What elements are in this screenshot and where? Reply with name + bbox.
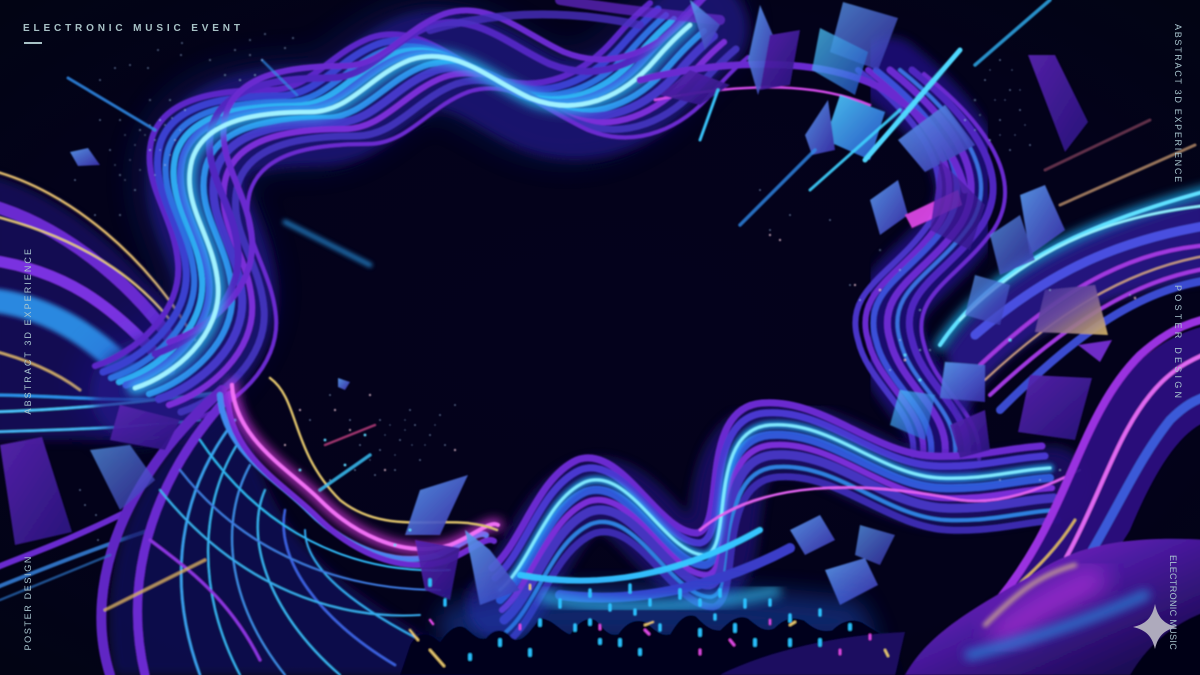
glitter particles <box>60 34 1135 545</box>
bottom wave ribbon <box>492 403 1080 642</box>
shards right <box>640 185 1112 675</box>
shards upper right <box>70 0 1088 250</box>
left vertical label: poster design: POSTER DESIGN <box>23 555 33 650</box>
shards lower left <box>0 378 520 605</box>
left vertical label: abstract 3D experience: ABSTRACT 3D EXPERIENCE <box>23 247 33 414</box>
title underline <box>24 42 42 44</box>
right ring ribbon <box>640 64 1005 459</box>
sparkle star icon <box>1133 604 1177 649</box>
right sweeping ribbons <box>940 190 1200 420</box>
left side ribbons <box>0 170 220 590</box>
top wave ribbon <box>95 0 748 420</box>
big lower right ribbon <box>905 318 1200 675</box>
right vertical label: abstract 3D experience: ABSTRACT 3D EXPERIENCE <box>1173 24 1183 184</box>
right vertical label: electronic music: ELECTRONIC MUSIC <box>1168 555 1178 650</box>
top left title: ELECTRONIC MUSIC EVENT <box>23 23 244 34</box>
lower left swirl ribbon <box>101 378 498 675</box>
crowd silhouette <box>400 580 905 675</box>
right vertical label: poster design: POSTER DESIGN <box>1173 285 1183 401</box>
